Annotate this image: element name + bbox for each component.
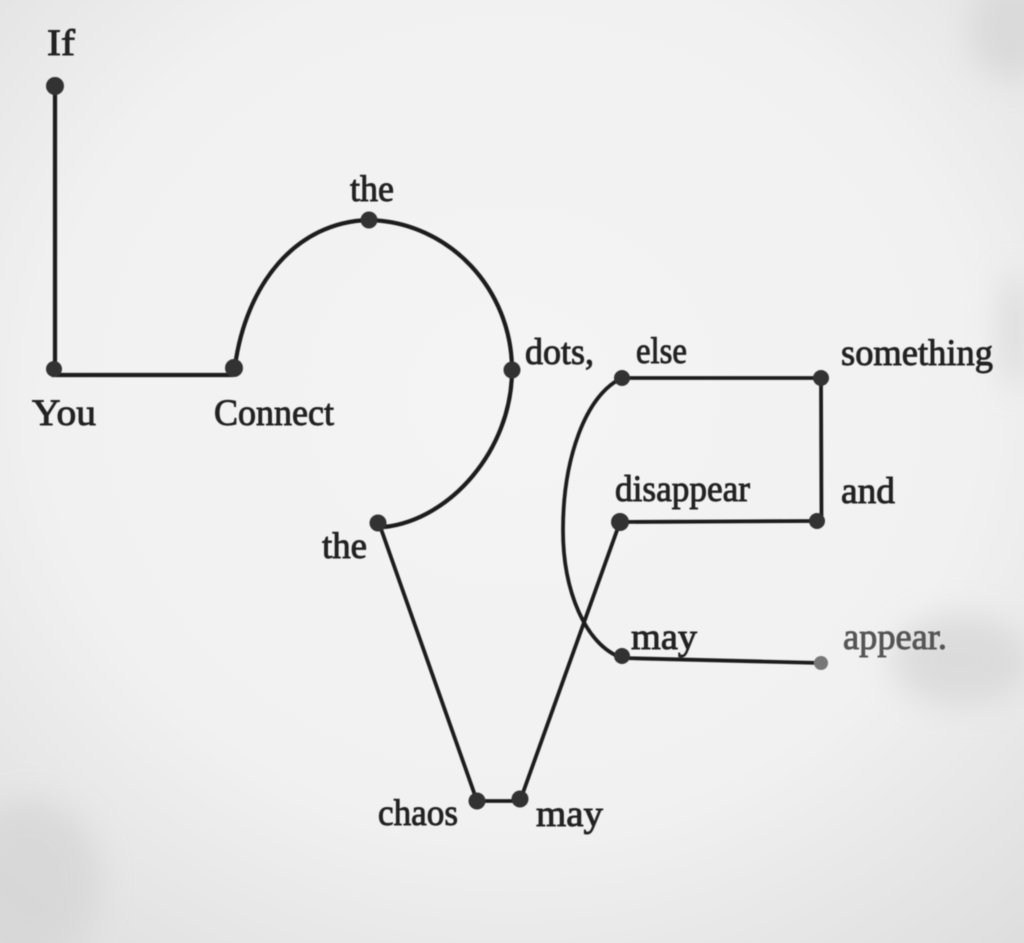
word labels: appear. (843, 617, 947, 658)
word labels: dots, (525, 332, 594, 373)
word labels: may (536, 794, 604, 835)
connecting line path (54, 86, 822, 801)
word labels: You (32, 393, 96, 434)
word labels: something (841, 333, 993, 374)
word labels: and (841, 471, 895, 512)
word labels: disappear (615, 469, 750, 510)
word labels: Connect (214, 393, 335, 434)
word labels: If (47, 23, 76, 64)
word labels: may (631, 617, 698, 658)
dots (46, 77, 829, 810)
word labels: the (350, 169, 394, 210)
word labels: chaos (378, 793, 458, 834)
word labels: the (322, 526, 367, 567)
word labels: else (636, 331, 687, 372)
